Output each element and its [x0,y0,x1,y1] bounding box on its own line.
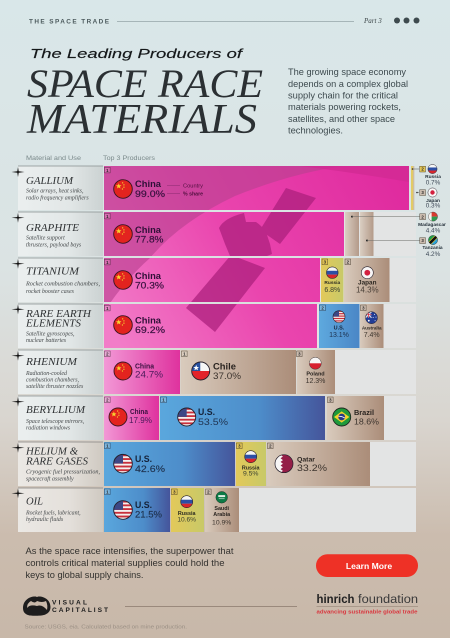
Madagascar and Tanzania segments [345,212,374,256]
material label: Gallium: GALLIUM [26,176,74,187]
Australia segment [360,304,384,348]
Japan callout: 0.3% [426,203,441,210]
Brazil segment [327,396,384,440]
star marker [12,397,24,407]
material label: Rare Earth: nuclear batteries [26,338,67,344]
Chile segment: 1 [183,352,186,356]
Russia segment [236,442,266,486]
material label: Rare Earth: RARE EARTH [25,309,93,320]
logo: Visual Capitalist [23,596,108,616]
intro text: satellites, and other space [288,113,395,124]
material label: Helium: Cryogenic fuel pressurization, [26,468,101,476]
Saudi Arabia segment: 2 [207,490,210,494]
logo: Hinrich Foundation [316,592,418,616]
Brazil segment: 3 [329,398,332,402]
China segment [104,350,180,394]
material label: Titanium [18,258,103,302]
China segment: 24.7% [135,370,163,380]
Tanzania callout: 3 [421,238,424,243]
annotation key: Country [183,184,204,190]
Russia segment: Russia [242,465,261,471]
Chile segment: Chile [213,362,236,373]
Qatar segment: 2 [269,444,272,448]
U.S. segment [319,304,360,348]
material label: Rare Earth [18,304,103,348]
Russia segment [321,258,344,302]
star marker [12,167,24,177]
material label: Gallium: radio frequency amplifiers [26,194,89,202]
material label: Rhenium: RHENIUM [25,357,78,368]
China segment: 17.9% [129,415,152,425]
material label: Graphite: Satellite support [26,236,65,242]
star marker [12,488,24,498]
material label: Helium: RARE GASES [25,456,89,468]
U.S. segment: 1 [106,444,109,448]
Poland segment: Poland [306,371,325,377]
China segment: China [135,271,162,281]
row: Beryllium [12,396,384,440]
Brazil segment: Brazil [354,410,374,417]
Russia segment: 9.5% [243,471,258,478]
China segment: 1 [106,168,109,173]
material label: Gallium [18,166,103,210]
Japan callout [416,188,441,210]
row: Titanium [12,258,390,302]
China segment [104,213,164,245]
U.S. segment: 21.5% [135,510,162,520]
Poland segment: 3 [298,352,301,356]
material label: Rhenium: satellite thruster nozzles [26,384,84,390]
source note: Source: USGS, eia. Calculated based on mine production. [24,624,187,630]
China segment: 69.2% [135,325,165,335]
Japan segment: 14.3% [356,285,379,294]
Russia segment: 3 [324,260,327,264]
material label: Oil [18,488,103,532]
Saudi Arabia segment: 10.9% [212,519,231,526]
column headings [26,155,155,162]
material label: Rare Earth: Satellite gyroscopes, [26,331,75,337]
closing statement: As the space race intensifies, the superpower that [26,546,234,557]
U.S. segment: 42.6% [135,464,165,474]
Russia callout [412,164,441,186]
Russia segment [171,488,204,532]
logo: Hinrich Foundation: advancing sustainable global trade [316,610,418,616]
Russia callout: 0.7% [426,179,441,186]
Qatar segment: Qatar [297,456,315,464]
star marker [12,443,24,453]
material label: Beryllium: radiation windows [26,426,71,432]
annotation key [167,184,204,198]
title [26,46,263,143]
column headings: Material and Use [26,155,82,162]
U.S. segment: U.S. [334,326,345,332]
closing statement: controls critical material supplies could hold the [26,558,224,569]
U.S. segment [160,396,325,440]
satellite [186,188,316,332]
intro text [288,66,408,136]
star marker [12,259,24,269]
intro text: materials powering rockets, [288,101,401,112]
Japan segment [344,258,390,302]
material label: Rare Earth: ELEMENTS [25,318,82,329]
China segment [104,305,165,335]
Tanzania callout: 4.2% [426,251,441,258]
material label: Helium [18,442,103,486]
pink China bars with satellite [104,166,409,348]
header strip: THE SPACE TRADE [29,18,110,26]
China segment: 2 [106,398,109,402]
button: Learn More [316,554,418,577]
title: The Leading Producers of [30,46,244,61]
Japan segment: Japan [358,280,377,286]
Saudi Arabia segment: Saudi [214,506,230,512]
Australia segment: Australia [362,326,382,330]
Russia segment: 10.6% [177,516,196,523]
material label: Graphite [18,212,103,256]
Russia segment: Russia [178,511,197,517]
U.S. segment: U.S. [198,406,215,417]
material label: Titanium: Rocket combustion chambers, [25,282,101,288]
Japan segment: 2 [347,260,350,264]
row: Graphite [12,212,446,258]
Japan callout: Japan [426,198,440,204]
material label: Helium: spacecraft assembly [26,475,74,482]
U.S. segment [104,442,235,486]
row: Rare Earth Elements [12,304,384,348]
material label: Rhenium: combustion chambers, [26,378,80,384]
material label: Oil: OIL [26,496,43,508]
China segment: 1 [106,306,109,311]
material label: Rhenium: Radiation-cooled [25,371,67,377]
U.S. segment: 2 [321,306,324,310]
Saudi Arabia segment [205,488,239,532]
Brazil segment: 18.6% [354,416,379,426]
header strip: Part 3 [363,17,382,25]
U.S. segment: 1 [106,490,109,494]
row: Gallium [12,164,441,210]
China segment: 1 [106,214,109,219]
material label: Beryllium: Space telescope mirrors, [26,419,85,425]
intro text: supply chain for the critical [288,90,398,100]
Madagascar callout: 2 [421,214,424,219]
Poland segment [296,350,335,394]
logo: Hinrich Foundation: foundation [358,592,418,606]
annotation key: % share [183,192,203,198]
Russia segment: 3 [238,444,241,448]
Qatar segment: 33.2% [297,463,327,473]
Russia segment: 6.8% [324,287,340,294]
China segment: China [135,364,154,370]
China segment: 1 [106,260,109,265]
Saudi Arabia segment: Arabia [213,512,231,518]
row: Rhenium [12,350,335,394]
Qatar segment [267,442,370,486]
material label: Graphite: thrusters, payload bays [26,242,82,248]
China segment: China [135,179,162,189]
Poland segment: 12.3% [306,378,325,385]
Madagascar callout: Madagascar [418,222,446,228]
Japan callout: 3 [421,190,424,195]
Tanzania callout [366,235,443,258]
material label: Helium: HELIUM & [25,446,79,458]
remaining share background bars [239,212,416,532]
Chile segment: 37.0% [213,371,241,381]
China segment: 70.3% [135,281,164,291]
Russia segment: Russia [324,280,340,286]
China segment [104,167,165,199]
logo: Visual Capitalist: VISUAL [52,600,87,607]
material label: Titanium: TITANIUM [26,266,80,278]
material label: Beryllium [18,396,103,440]
title: MATERIALS [26,97,257,143]
material label: Oil: hydraulic fluids [26,516,64,523]
column headings: Top 3 Producers [103,155,155,162]
Madagascar callout: 4.4% [426,228,441,234]
star marker [12,351,24,361]
star marker [12,213,24,223]
U.S. segment: 53.5% [198,417,228,427]
China segment: 77.8% [135,235,164,245]
China segment: China [135,225,162,235]
China segment [104,259,164,291]
title: SPACE RACE [27,61,263,106]
logo: Hinrich Foundation: hinrich [316,592,354,606]
U.S. segment [104,488,170,532]
U.S. segment: 13.1% [329,332,349,339]
material label: Beryllium: BERYLLIUM [26,405,86,416]
Australia segment: 7.4% [364,332,380,339]
Tanzania callout: Tanzania [422,245,443,251]
footer rule [125,606,297,608]
Russia callout: 2 [421,167,424,172]
material label: Gallium: Solar arrays, heat sinks, [26,188,84,194]
China segment: China [130,409,148,416]
row: Helium and Rare Gases [12,442,370,486]
Madagascar callout [351,212,446,234]
material label: Graphite: GRAPHITE [26,223,80,234]
material label: Rhenium [18,350,103,394]
row: Oil [12,488,239,532]
China segment: 99.0% [135,189,165,199]
intro text: technologies. [288,124,343,136]
closing statement [26,546,234,581]
Chile segment [180,350,296,394]
China segment [104,396,159,440]
star marker [12,304,24,314]
button: Learn More: Learn More [346,561,392,571]
U.S. segment: 1 [162,398,165,402]
intro text: The growing space economy [288,66,406,77]
Australia segment: 3 [362,306,365,310]
Russia callout: Russia [425,174,441,180]
U.S. segment: U.S. [135,499,152,510]
material label: Titanium: rocket booster cases [26,289,75,295]
China segment: China [135,316,162,326]
U.S. segment: U.S. [135,453,152,464]
material label: Oil: Rocket fuels, lubricant, [25,509,81,516]
Russia segment: 3 [173,490,176,494]
Russia and Japan slivers [411,166,414,210]
logo: Visual Capitalist: CAPITALIST [52,607,108,614]
China segment: 2 [106,352,109,356]
closing statement: keys to global supply chains. [26,570,144,581]
intro text: depends on a complex global [288,78,408,89]
header strip [29,17,420,26]
